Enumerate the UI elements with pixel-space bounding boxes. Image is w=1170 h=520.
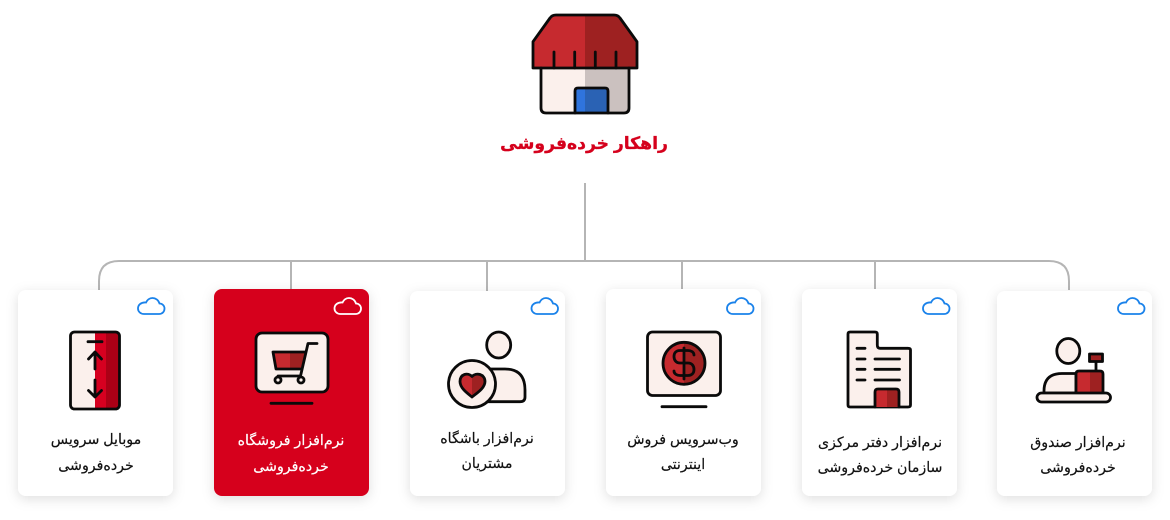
- label: مشتریان: [461, 456, 513, 472]
- icon: cashier: [1037, 338, 1110, 402]
- label: سازمان خرده‌فروشی: [818, 460, 942, 476]
- icon: user with heart: [448, 332, 525, 408]
- label: خرده‌فروشی: [253, 459, 329, 475]
- icon: cart monitor: [256, 333, 328, 403]
- icon: office building: [848, 332, 910, 407]
- icon: phone: [70, 332, 120, 409]
- panel: mobile service: [18, 290, 173, 496]
- icon: dollar monitor: [648, 332, 720, 407]
- icon: cloud: [138, 298, 164, 314]
- connector lines: [99, 183, 1069, 291]
- label: نرم‌افزار صندوق: [1030, 435, 1126, 451]
- icon: cloud: [727, 298, 754, 314]
- panel: store software (active): [214, 289, 369, 496]
- label: وب‌سرویس فروش: [627, 432, 739, 448]
- label: خرده‌فروشی: [1040, 460, 1116, 476]
- label: نرم‌افزار دفتر مرکزی: [818, 435, 942, 451]
- panel: online sales web service: [606, 289, 761, 496]
- panel: central office software: [802, 289, 957, 496]
- icon: cloud: [923, 298, 950, 314]
- icon: cloud: [1118, 298, 1144, 314]
- title: راهکار خرده‌فروشی: [500, 133, 668, 154]
- panel: cash register software: [997, 291, 1152, 496]
- label: موبایل سرویس: [51, 432, 141, 448]
- label: خرده‌فروشی: [58, 458, 134, 474]
- label: نرم‌افزار فروشگاه: [238, 432, 344, 449]
- panel: customer club: [410, 291, 565, 496]
- icon: cloud: [532, 298, 558, 314]
- label: اینترنتی: [661, 457, 705, 473]
- icon: cloud: [334, 298, 361, 314]
- label: نرم‌افزار باشگاه: [440, 430, 534, 447]
- icon: store: [533, 15, 637, 113]
